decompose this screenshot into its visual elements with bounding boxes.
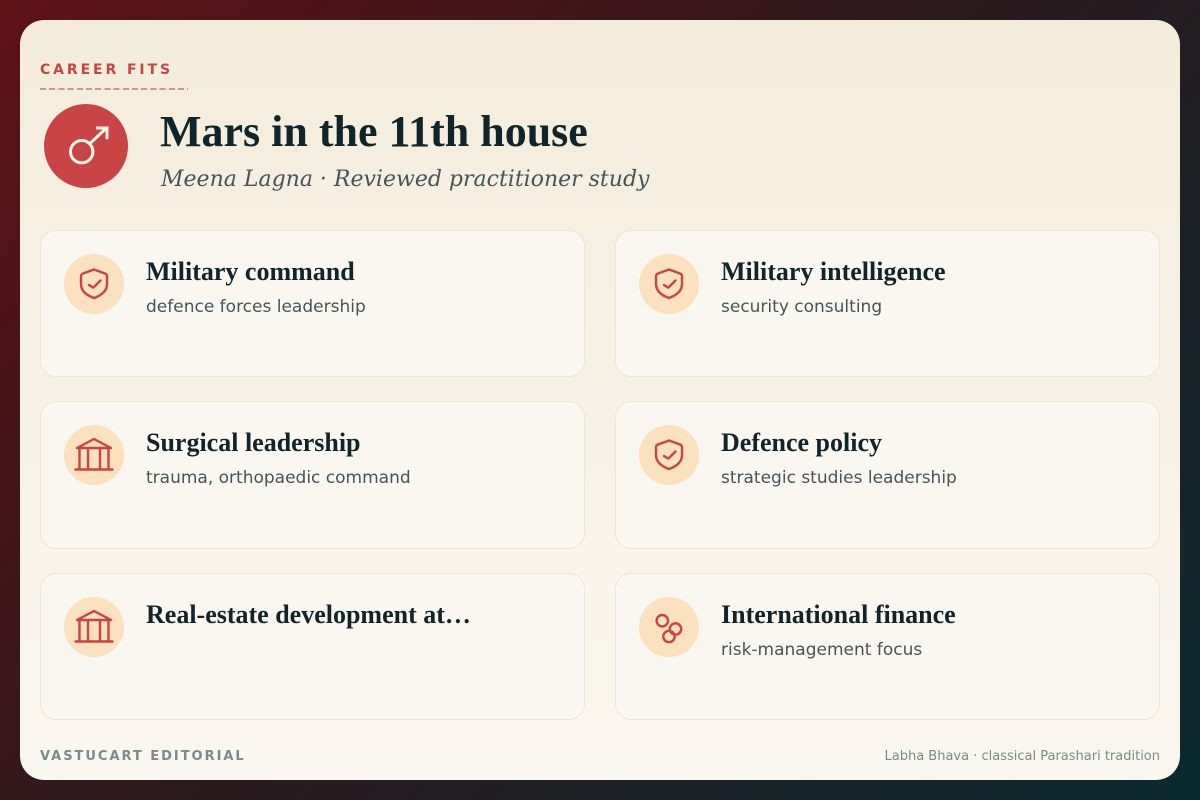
card: international finance	[615, 573, 1160, 720]
card title: Real-estate development at…	[146, 600, 471, 629]
card title: International finance	[721, 600, 956, 629]
card title: Surgical leadership	[146, 428, 361, 457]
title: Mars in the 11th house	[160, 106, 588, 156]
icon: linked rings	[639, 597, 699, 657]
eyebrow label: career fits: CAREER FITS	[40, 62, 173, 78]
footer brand: VASTUCART EDITORIAL	[40, 749, 246, 764]
icon: institution	[64, 425, 124, 485]
icon: shield	[639, 254, 699, 314]
card: defence policy	[615, 401, 1160, 549]
card title: Defence policy	[721, 428, 882, 457]
card description: defence forces leadership	[146, 297, 366, 317]
card description: trauma, orthopaedic command	[146, 468, 411, 488]
card: military command	[40, 230, 585, 377]
card: real-estate development	[40, 573, 585, 720]
card: military intelligence	[615, 230, 1160, 377]
card description: strategic studies leadership	[721, 468, 957, 488]
card description: security consulting	[721, 297, 882, 317]
card description: risk-management focus	[721, 640, 922, 660]
icon: Mars symbol badge	[44, 104, 128, 188]
card: surgical leadership	[40, 401, 585, 549]
footer tradition note: Labha Bhava · classical Parashari tradition	[884, 749, 1160, 764]
icon: shield	[639, 425, 699, 485]
icon: institution	[64, 597, 124, 657]
card title: Military intelligence	[721, 257, 946, 286]
card title: Military command	[146, 257, 355, 286]
icon: shield	[64, 254, 124, 314]
subtitle: Meena Lagna · Reviewed practitioner study	[161, 167, 649, 192]
